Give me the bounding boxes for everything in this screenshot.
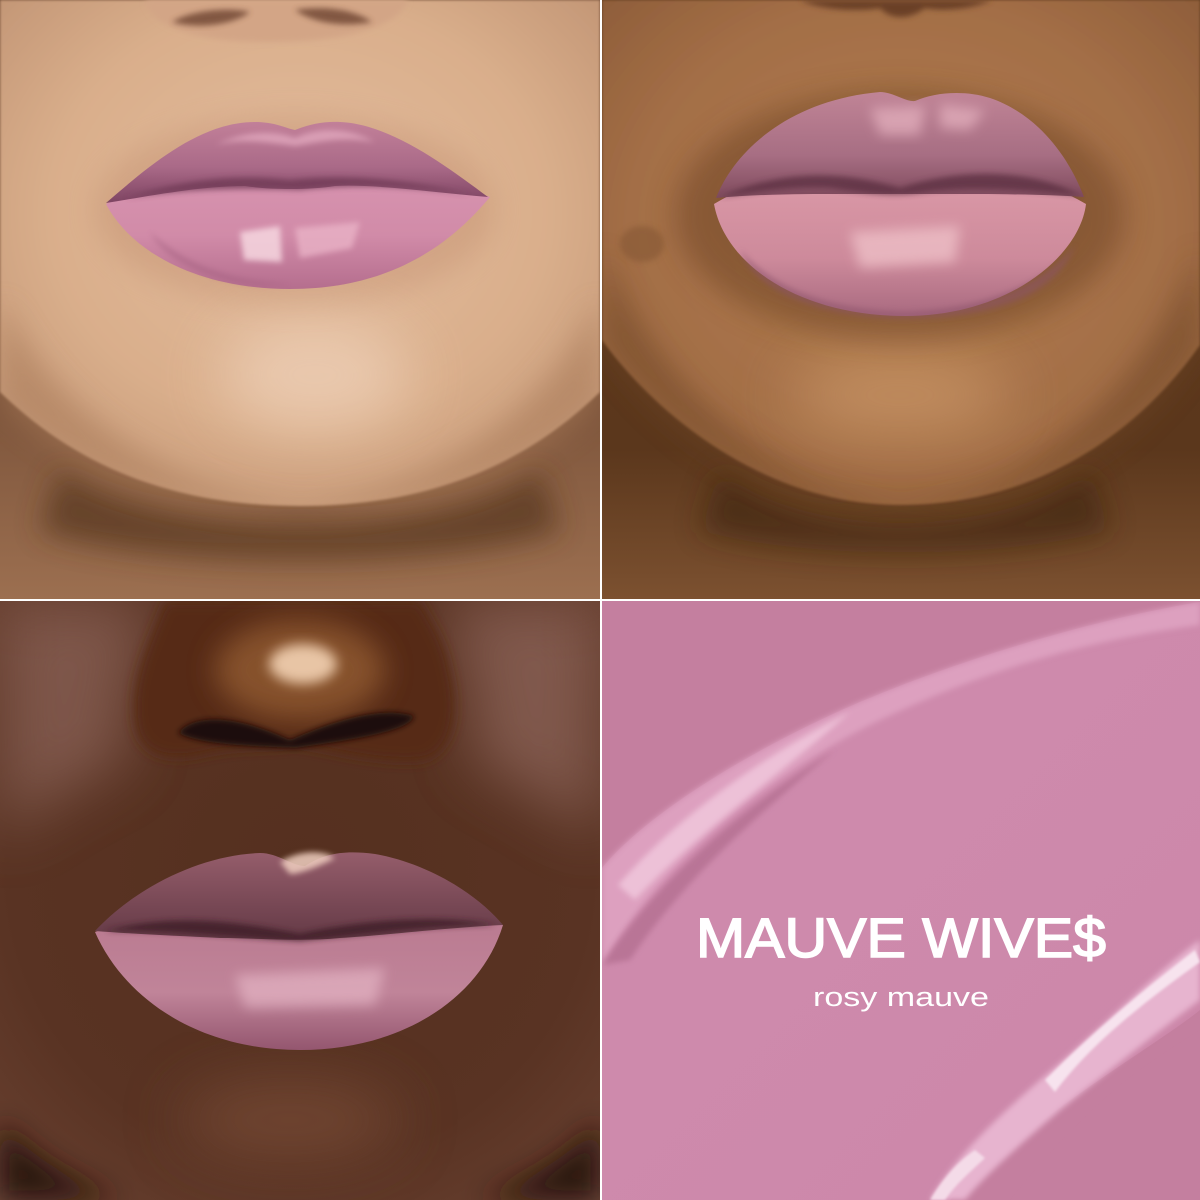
panel: deep skin tone lips — [0, 601, 600, 1200]
chin shadow: light skin — [40, 470, 560, 560]
panel: product swatch — [602, 601, 1200, 1200]
chin shadow: medium skin — [700, 470, 1110, 552]
icon: nose — [134, 601, 455, 761]
panel: medium skin tone lips — [602, 0, 1200, 599]
face: light skin — [0, 0, 600, 506]
panel: light skin tone lips — [0, 0, 600, 599]
lips: deep skin — [95, 852, 503, 1050]
skin mark — [620, 226, 664, 262]
icon: nose tip — [145, 0, 408, 42]
lips: light skin — [95, 115, 495, 305]
icon: nose tip — [800, 0, 992, 17]
swatch smear — [602, 602, 1200, 1200]
lips: medium skin — [714, 92, 1086, 318]
title: MAUVE WIVE$ — [696, 906, 1106, 969]
subtitle: rosy mauve — [813, 982, 989, 1012]
face: medium skin — [602, 0, 1200, 505]
